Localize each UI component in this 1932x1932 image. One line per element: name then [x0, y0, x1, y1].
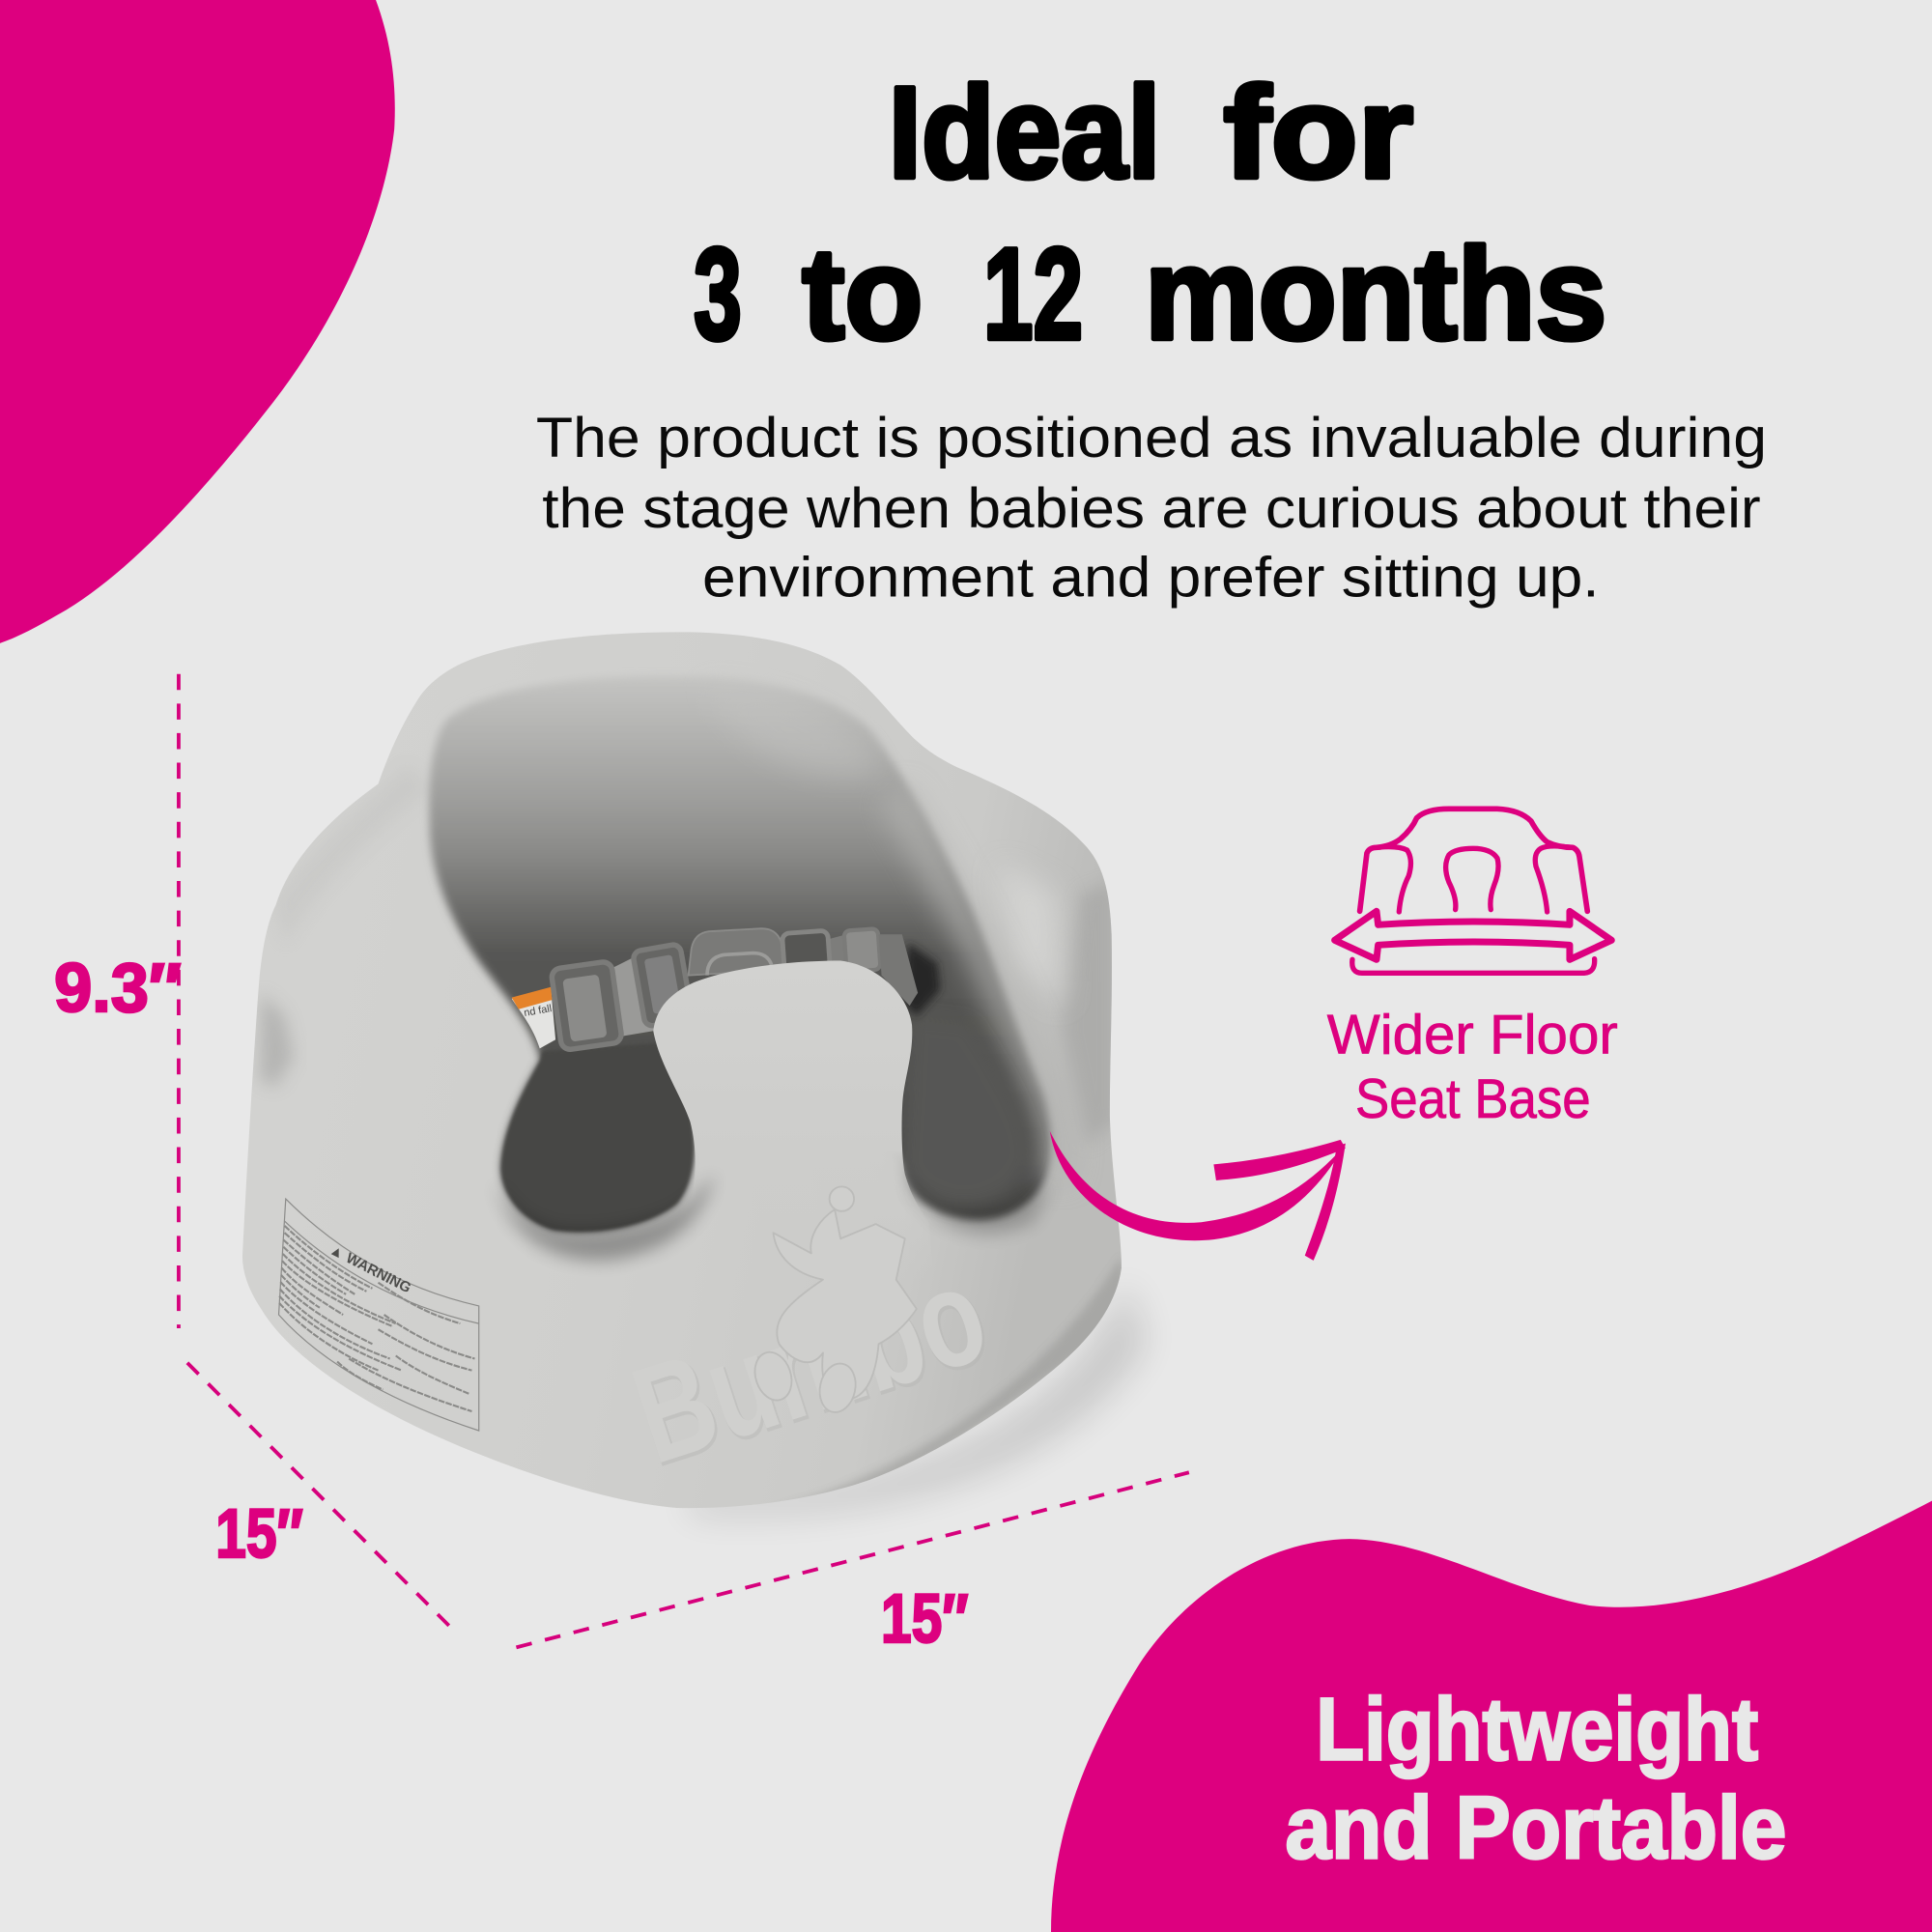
decorative blob: bottom right: [1051, 1501, 1932, 1932]
arrow: seat base to callout: [1050, 1131, 1346, 1261]
callout: lightweight and portable: Lightweight: [1316, 1680, 1758, 1778]
callout label: wider floor seat base: [1327, 1005, 1618, 1130]
description text: [536, 407, 1767, 609]
left hole: [501, 1039, 700, 1232]
title: 12: [983, 221, 1083, 367]
buckle 1: [551, 961, 622, 1051]
title: 3: [694, 221, 742, 367]
dimension label: height: 9.3″: [54, 950, 181, 1027]
description text: environment and prefer sitting up.: [702, 546, 1600, 609]
seat surface shading: [260, 765, 1127, 1514]
center plate ring: [707, 953, 772, 976]
seat back and cavity: [429, 676, 1051, 1232]
seat pommel: [653, 960, 934, 1280]
hole shadow halos: [496, 1175, 1054, 1261]
back wall highlight: [700, 683, 882, 777]
dimension label: depth: 15″: [215, 1495, 303, 1573]
seat harness strap: [512, 928, 918, 1051]
embossed brand name: Bumbo: [616, 1236, 1004, 1493]
callout label: wider floor seat base: Seat Base: [1355, 1068, 1591, 1130]
title: months: [1145, 221, 1606, 367]
warning label: [279, 1199, 479, 1431]
title: to: [802, 221, 923, 367]
title: Ideal: [889, 60, 1161, 206]
right cavity wall light: [894, 794, 1057, 1180]
dimension label: width: 15″: [881, 1580, 969, 1658]
description text: The product is positioned as invaluable during: [536, 407, 1767, 469]
webbing: [604, 952, 665, 1037]
buckle 2 roller: [644, 954, 681, 1014]
warning label: ▲ WARNING: [327, 1241, 413, 1296]
strap label: [512, 988, 555, 1048]
embossed elephant logo: [749, 1186, 917, 1415]
description text: the stage when babies are curious about their: [542, 477, 1761, 540]
callout: lightweight and portable: [1285, 1680, 1786, 1877]
icon: wider seat base: [1335, 809, 1611, 973]
product: floor seat: [242, 632, 1127, 1514]
seat body: [242, 632, 1122, 1508]
strap end: [879, 934, 918, 1006]
embossed brand name: Bumbo: [618, 1239, 1005, 1495]
buckle 4: [844, 928, 881, 972]
right hole: [902, 1016, 1031, 1206]
callout: lightweight and portable: and Portable: [1285, 1778, 1786, 1877]
strap shadow: [905, 943, 940, 1016]
seat harness strap: nd fall: [523, 1003, 553, 1019]
buckle 3: [782, 930, 830, 970]
decorative blob: top left: [0, 0, 395, 643]
floor shadow under seat: [690, 1282, 1146, 1515]
buckle 2: [633, 944, 693, 1027]
dimension lines: [179, 674, 1189, 1647]
callout label: wider floor seat base: Wider Floor: [1327, 1005, 1618, 1066]
center plate: [689, 928, 788, 976]
title: [694, 60, 1606, 367]
buckle 1 roller: [562, 975, 608, 1042]
embossed brand name: [616, 1236, 1005, 1495]
title: for: [1224, 60, 1413, 206]
